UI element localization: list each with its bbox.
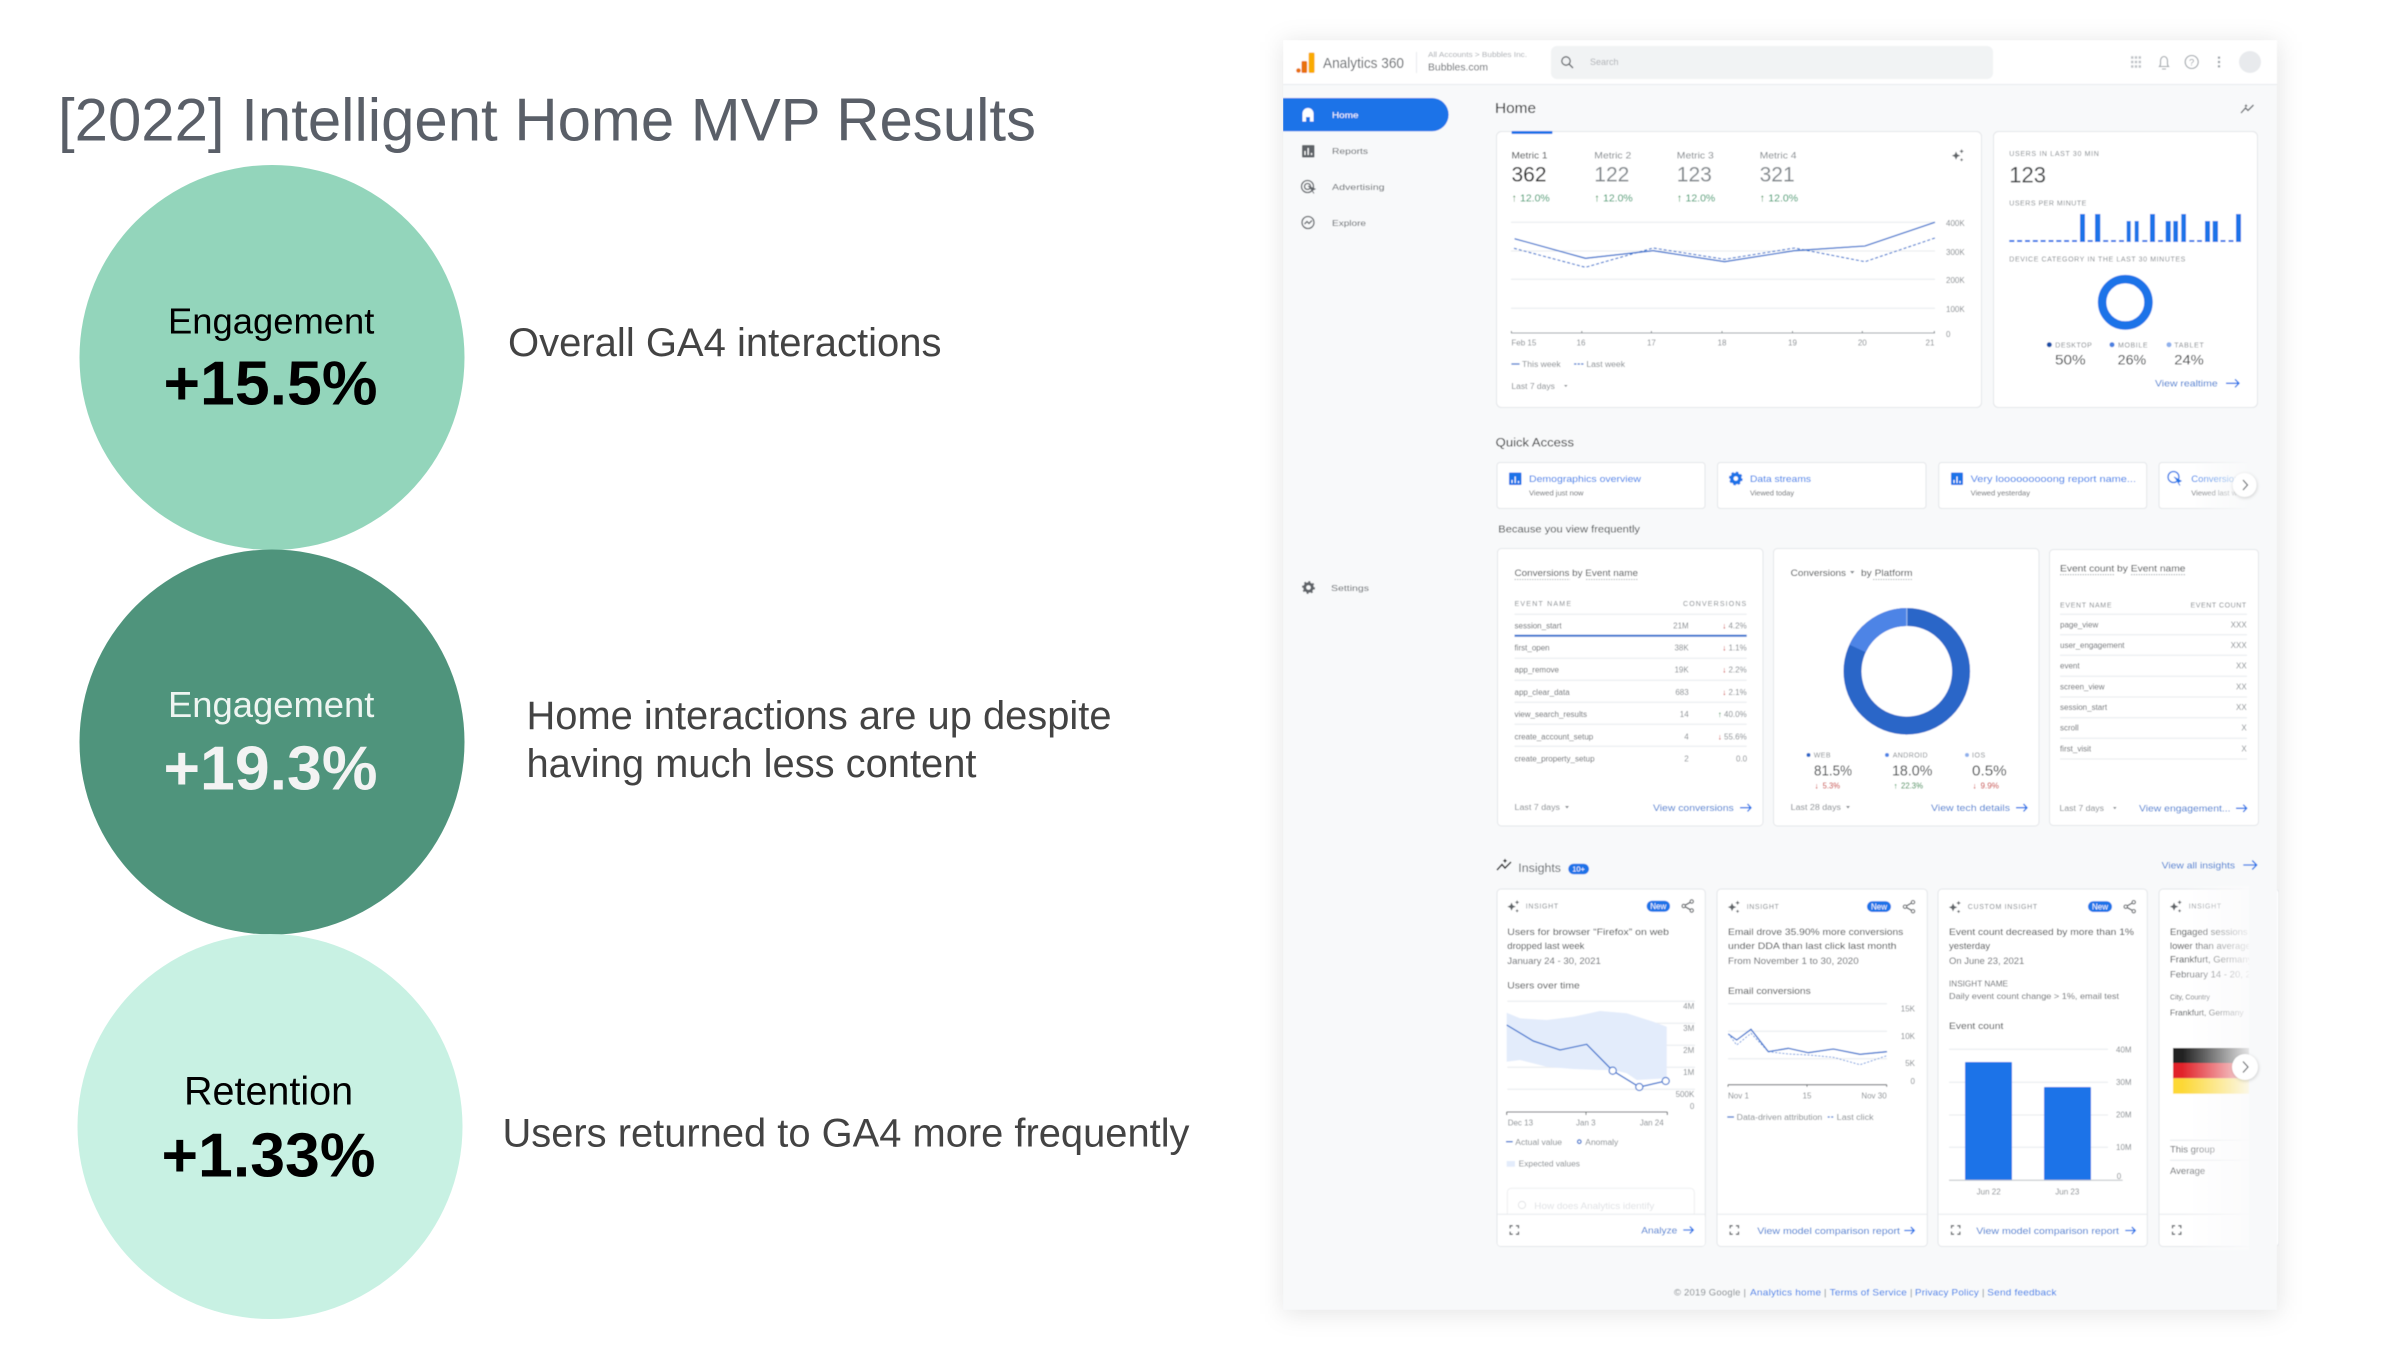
line chart: 300K xyxy=(1946,248,1965,257)
metric tabs: ↑ xyxy=(1594,193,1600,205)
card footer xyxy=(2060,804,2247,815)
card footer: Last 7 days xyxy=(1514,803,1560,812)
table rows: XX xyxy=(2236,703,2247,712)
account breadcrumb xyxy=(1428,50,1527,74)
line chart: 19 xyxy=(1788,339,1797,348)
page heading: home: Home xyxy=(1495,100,1536,117)
insight text: February 14 - 20, 2021 xyxy=(2170,970,2267,981)
line chart: 20 xyxy=(1858,339,1867,348)
button: next chevron xyxy=(2232,1054,2258,1081)
button: next chevron xyxy=(2233,473,2257,498)
card footer xyxy=(1514,803,1751,814)
metric tabs: Metric 3 xyxy=(1677,150,1714,160)
icon: germany flag xyxy=(2173,1048,2249,1094)
insight text: Daily event count change > 1%, email test xyxy=(1949,991,2120,1001)
bar chart: event count: 0 xyxy=(2117,1172,2122,1181)
card: conversions by event name: CONVERSIONS xyxy=(1683,601,1747,608)
insight text: under DDA than last click last month xyxy=(1728,941,1896,952)
chart: users over time xyxy=(1507,1001,1695,1128)
insight text: City, Country xyxy=(2170,994,2210,1001)
table rows: event xyxy=(2060,662,2080,671)
link: view realtime: View realtime xyxy=(2155,379,2218,390)
dashboard footer links: Analytics home xyxy=(1750,1288,1821,1299)
insight text xyxy=(1728,927,1904,997)
table rows: ↓ 55.6% xyxy=(1718,732,1747,741)
dashboard footer links: | xyxy=(1824,1288,1827,1299)
heading: insights: 10+ xyxy=(1572,864,1586,874)
bar chart: event count: Jun 23 xyxy=(2055,1187,2080,1196)
description: overall GA4 interactions: Overall GA4 interactions xyxy=(508,321,942,365)
table rows: 21M xyxy=(1673,622,1689,631)
metric circle: retention 1.33%: Retention xyxy=(184,1070,353,1114)
card footer: View model comparison report xyxy=(1976,1226,2119,1237)
chart: email conversions: 5K xyxy=(1905,1059,1916,1068)
tile: conversions partial xyxy=(2159,460,2272,512)
icon: insights trend xyxy=(2241,104,2254,113)
insight text: Users over time xyxy=(1507,981,1580,992)
chart: email conversions: Nov 30 xyxy=(1861,1091,1887,1100)
insight text: Event count decreased by more than 1% xyxy=(1949,927,2135,938)
metric circle: engagement 15.5%: +15.5% xyxy=(164,350,378,418)
platform legend: WEB xyxy=(1814,752,1831,759)
chart legend xyxy=(1727,1113,1875,1122)
table rows: view_search_results xyxy=(1514,710,1587,719)
table rows: X xyxy=(2241,724,2247,733)
link: view all insights: View all insights xyxy=(2162,860,2235,871)
line chart: 100K xyxy=(1946,305,1965,314)
tile: data streams: Data streams xyxy=(1750,474,1811,485)
platform legend: 9.9% xyxy=(1980,781,1999,790)
insight text: INSIGHT NAME xyxy=(1949,980,2008,989)
table rows xyxy=(1514,614,1748,763)
table rows: X xyxy=(2241,744,2247,753)
chart legend xyxy=(1511,360,1626,369)
table rows: session_start xyxy=(2060,703,2108,712)
heading: insights: Insights xyxy=(1518,863,1561,875)
table rows: XXX xyxy=(2231,641,2247,650)
chart legend: Data-driven attribution xyxy=(1737,1113,1822,1122)
card: realtime users: 123 xyxy=(2009,162,2046,187)
nav item: advertising: Advertising xyxy=(1332,183,1384,192)
table rows: app_remove xyxy=(1514,666,1560,675)
insight text xyxy=(1507,927,1669,992)
chart: email conversions: 10K xyxy=(1901,1032,1916,1041)
card: conversions by platform: Conversions xyxy=(1791,568,1847,578)
chart: users over time: 3M xyxy=(1683,1024,1695,1033)
insight text xyxy=(2170,927,2267,1017)
insight text: Email drove 35.90% more conversions xyxy=(1728,927,1904,938)
device legend: 24% xyxy=(2174,351,2204,367)
insight card: email conversions: INSIGHT xyxy=(1747,904,1780,911)
insight card: frankfurt partial xyxy=(2159,886,2279,1250)
metric circle: engagement 15.5% xyxy=(80,165,464,550)
table rows: XX xyxy=(2236,682,2247,691)
chart: users over time: 500K xyxy=(1676,1090,1695,1099)
card: realtime users: USERS PER MINUTE xyxy=(2009,201,2087,208)
table rows: ↓ 4.2% xyxy=(1722,622,1747,631)
insight text: From November 1 to 30, 2020 xyxy=(1728,956,1859,967)
tile: long report name: Viewed yesterday xyxy=(1971,489,2030,498)
insight text: Users for browser “Firefox” on web xyxy=(1507,927,1669,938)
insight card: email conversions: New xyxy=(1871,902,1887,912)
nav item: reports xyxy=(1302,145,1368,158)
dashboard footer links: Terms of Service xyxy=(1830,1288,1907,1299)
platform legend: ANDROID xyxy=(1893,752,1928,759)
bar chart: event count: 30M xyxy=(2116,1078,2132,1087)
table rows: user_engagement xyxy=(2060,641,2125,650)
dashboard footer links: Send feedback xyxy=(1987,1288,2057,1299)
faded question prompt: How does Analytics identify xyxy=(1534,1201,1655,1212)
card: metrics line chart xyxy=(1496,131,1982,408)
chart legend: Last click xyxy=(1837,1113,1875,1122)
table rows: app_clear_data xyxy=(1514,688,1570,697)
bar chart: event count: 10M xyxy=(2116,1143,2132,1152)
insight card: event count custom insight xyxy=(1938,889,2147,1246)
card: conversions by event name: EVENT NAME xyxy=(1514,601,1572,608)
card: conversions by event name: Conversions by Event name xyxy=(1514,568,1638,578)
metric tabs: ↑ xyxy=(1760,193,1765,205)
heading: quick access: Quick Access xyxy=(1496,438,1574,450)
insight text: yesterday xyxy=(1949,941,1990,952)
bar chart: event count xyxy=(1949,1045,2132,1196)
chart: users over time: Jan 24 xyxy=(1640,1119,1664,1128)
card: conversions by platform xyxy=(1774,548,2039,826)
comparison rows xyxy=(2170,1140,2250,1177)
metric tabs: 122 xyxy=(1594,164,1629,187)
tile: conversions partial: Conversions xyxy=(2191,474,2244,485)
icon: sparkle xyxy=(1952,149,1964,162)
metric tabs: Metric 2 xyxy=(1594,150,1631,160)
chart: users over time: 2M xyxy=(1683,1046,1695,1055)
tile: demographics overview: Viewed just now xyxy=(1529,489,1584,498)
table rows: 38K xyxy=(1674,644,1689,653)
card: realtime users: DEVICE CATEGORY IN THE LAST 30 MINUTES xyxy=(2009,257,2186,264)
panel: analytics dashboard screenshot xyxy=(1283,40,2279,1310)
metric circle: engagement 15.5%: Engagement xyxy=(168,300,374,342)
faded question prompt xyxy=(1507,1188,1694,1218)
insight text: lower than average xyxy=(2170,941,2251,952)
platform legend: 81.5% xyxy=(1814,763,1852,780)
chart legend: Expected values xyxy=(1519,1160,1580,1169)
link: view realtime xyxy=(2155,379,2239,390)
dashboard footer links: Privacy Policy xyxy=(1915,1288,1979,1299)
insight card: event count custom insight: New xyxy=(2092,902,2108,912)
metric tabs: ↑ xyxy=(1512,193,1517,205)
metric tabs: ↑ xyxy=(1677,193,1682,205)
sidebar navigation xyxy=(1283,98,1449,593)
nav item: explore: Explore xyxy=(1332,219,1367,228)
bar chart: users per minute xyxy=(2009,214,2241,242)
card footer: Analyze xyxy=(1641,1225,1677,1236)
tile: data streams: Viewed today xyxy=(1750,489,1794,498)
platform legend: 5.3% xyxy=(1823,781,1840,790)
metric tabs: 123 xyxy=(1677,164,1712,187)
device legend: TABLET xyxy=(2174,342,2205,349)
search box: Search xyxy=(1590,57,1619,67)
insight text: Frankfurt, Germany xyxy=(2170,954,2253,966)
card footer xyxy=(1498,1214,1705,1246)
chart legend: This week xyxy=(1522,360,1562,369)
metric circle: engagement 19.3%: Engagement xyxy=(168,684,374,725)
table rows: ↑ 40.0% xyxy=(1718,710,1747,719)
device legend: MOBILE xyxy=(2118,342,2148,349)
comparison rows: This group xyxy=(2170,1145,2215,1156)
metric circle: retention 1.33% xyxy=(78,934,462,1319)
description: home interactions xyxy=(526,694,1112,786)
card footer xyxy=(1791,803,2027,814)
metric tabs: Metric 4 xyxy=(1760,150,1797,160)
nav item: settings: Settings xyxy=(1331,584,1369,593)
platform legend: ↓ xyxy=(1814,781,1818,790)
bar chart: event count: 20M xyxy=(2116,1111,2132,1120)
insight card: firefox users xyxy=(1497,889,1705,1246)
donut chart: platform xyxy=(1852,608,1961,726)
heading: because you view frequently: Because you view frequently xyxy=(1498,525,1640,536)
tile: long report name: Very looooooooong report name... xyxy=(1971,474,2136,485)
card: realtime users xyxy=(1994,132,2258,408)
card footer: View engagement... xyxy=(2139,804,2230,815)
platform legend: 0.5% xyxy=(1972,763,2007,780)
card footer xyxy=(1938,1214,2147,1237)
card: event count by event name: EVENT NAME xyxy=(2060,602,2112,609)
card footer xyxy=(1718,1214,1927,1237)
search box xyxy=(1551,46,1993,79)
table rows: 0.0 xyxy=(1736,754,1748,763)
card footer: Last 28 days xyxy=(1791,803,1841,812)
table rows: create_property_setup xyxy=(1514,754,1595,763)
platform legend: 22.3% xyxy=(1901,781,1923,790)
device legend xyxy=(2047,342,2205,367)
tile: demographics overview xyxy=(1497,462,1705,508)
header icons xyxy=(2131,51,2261,73)
description: home interactions: Home interactions are up despite xyxy=(526,694,1112,738)
chart: email conversions: 15K xyxy=(1901,1004,1916,1013)
card: conversions by event name xyxy=(1498,548,1763,826)
bar chart: event count: Jun 22 xyxy=(1977,1187,2001,1196)
header bar xyxy=(1283,40,2277,84)
description: users returned: Users returned to GA4 more frequently xyxy=(502,1111,1190,1155)
table rows: 683 xyxy=(1675,688,1689,697)
metric tabs: 12.0% xyxy=(1686,193,1715,205)
card footer: View tech details xyxy=(1931,803,2010,814)
card: event count by event name: EVENT COUNT xyxy=(2190,602,2247,609)
card: conversions by platform: by Platform xyxy=(1861,568,1912,578)
insight text: Engaged sessions xyxy=(2170,927,2248,938)
metric tabs: 362 xyxy=(1512,164,1547,187)
tile: conversions partial: Viewed last week xyxy=(2191,489,2249,498)
metric circle: engagement 19.3% xyxy=(80,550,464,934)
product name: Analytics 360 xyxy=(1323,55,1404,72)
metric tabs: Metric 1 xyxy=(1512,150,1548,160)
card: event count by event name: Event count by Event name xyxy=(2060,563,2186,573)
metric tabs: 12.0% xyxy=(1768,193,1798,205)
chart legend xyxy=(1506,1138,1618,1169)
tile: long report name xyxy=(1939,462,2147,508)
metric circle: retention 1.33%: +1.33% xyxy=(162,1122,376,1190)
insight card: firefox users: New xyxy=(1650,902,1667,911)
dashboard footer links: | xyxy=(1910,1288,1913,1299)
metric tabs: 321 xyxy=(1760,164,1795,187)
insight card: email conversions xyxy=(1717,889,1927,1246)
line chart: Feb 15 xyxy=(1511,339,1537,348)
chart: email conversions xyxy=(1728,1004,1916,1100)
insight text xyxy=(1949,927,2135,1032)
line chart: 16 xyxy=(1577,339,1586,348)
account breadcrumb: Bubbles.com xyxy=(1428,62,1488,74)
chart: users over time: 1M xyxy=(1683,1068,1695,1077)
quick access tiles xyxy=(1497,460,2272,512)
table rows: screen_view xyxy=(2060,682,2105,691)
nav item: reports: Reports xyxy=(1332,147,1368,156)
platform legend: ↑ xyxy=(1894,781,1898,790)
table rows: scroll xyxy=(2060,724,2079,733)
metric circle: engagement 19.3%: +19.3% xyxy=(164,734,378,804)
dashboard footer links: | xyxy=(1982,1288,1985,1299)
metric tabs: 12.0% xyxy=(1520,193,1550,205)
chart: email conversions: 15 xyxy=(1803,1091,1812,1100)
chart: email conversions: 0 xyxy=(1911,1077,1916,1086)
card footer: Last 7 days xyxy=(2060,804,2104,813)
table rows: first_open xyxy=(1514,644,1550,653)
panel shadow xyxy=(1283,42,2279,1314)
platform legend: IOS xyxy=(1972,752,1986,759)
insight text: January 24 - 30, 2021 xyxy=(1507,956,1601,967)
platform legend: 18.0% xyxy=(1892,763,1932,780)
insight text: dropped last week xyxy=(1507,941,1585,952)
comparison rows: Average xyxy=(2170,1166,2205,1177)
metric tabs: 12.0% xyxy=(1603,193,1633,205)
nav item: advertising xyxy=(1302,180,1384,194)
table rows: ↓ 1.1% xyxy=(1722,644,1747,653)
insight card: firefox users: INSIGHT xyxy=(1526,904,1559,911)
nav item: settings xyxy=(1303,582,1369,593)
platform legend: ↓ xyxy=(1972,781,1976,790)
insight card: frankfurt partial: INSIGHT xyxy=(2189,904,2222,911)
donut chart: device category xyxy=(2102,279,2148,325)
table rows: ↓ 2.1% xyxy=(1722,688,1747,697)
table rows: 14 xyxy=(1680,710,1689,719)
line chart: 17 xyxy=(1647,339,1656,348)
table rows xyxy=(2060,614,2247,759)
card footer: View model comparison report xyxy=(1757,1226,1900,1237)
title: [2022] Intelligent Home MVP Results xyxy=(58,86,1036,154)
chart: users over time: Jan 3 xyxy=(1576,1119,1596,1128)
table rows: session_start xyxy=(1514,622,1562,631)
header icons: ? xyxy=(2189,58,2194,68)
line chart: 18 xyxy=(1718,339,1727,348)
device legend: 50% xyxy=(2055,351,2086,367)
nav item: home active xyxy=(1283,98,1449,131)
insight text: Event count xyxy=(1949,1021,2004,1032)
tile: data streams xyxy=(1718,462,1926,508)
chart legend: Anomaly xyxy=(1585,1138,1618,1147)
device legend: 26% xyxy=(2118,351,2146,367)
table rows: 4 xyxy=(1684,732,1689,741)
table rows: XXX xyxy=(2231,620,2247,629)
chart: users over time: Dec 13 xyxy=(1508,1119,1534,1128)
chart legend: Actual value xyxy=(1515,1138,1563,1147)
metric tabs xyxy=(1512,150,1798,205)
line chart: 200K xyxy=(1946,276,1965,285)
insight text: Frankfurt, Germany xyxy=(2170,1007,2244,1017)
insight card: event count custom insight: CUSTOM INSIGHT xyxy=(1968,904,2038,911)
account breadcrumb: All Accounts > Bubbles Inc. xyxy=(1428,50,1527,59)
chart: users over time: 0 xyxy=(1690,1102,1695,1111)
nav item: explore xyxy=(1302,216,1367,228)
card: realtime users: USERS IN LAST 30 MIN xyxy=(2009,151,2099,158)
dashboard footer links: © 2019 Google | xyxy=(1674,1288,1746,1299)
card footer: View conversions xyxy=(1653,803,1734,814)
chart: users over time: 4M xyxy=(1683,1002,1695,1011)
icon: analytics logo xyxy=(1296,52,1315,73)
dashboard footer links xyxy=(1674,1288,2057,1299)
insight text: Email conversions xyxy=(1728,986,1811,997)
device legend: DESKTOP xyxy=(2055,342,2092,349)
platform legend xyxy=(1806,752,2007,790)
table rows: XX xyxy=(2236,662,2247,671)
table rows: 2 xyxy=(1684,754,1689,763)
line chart xyxy=(1511,219,1965,348)
tile: demographics overview: Demographics overview xyxy=(1529,474,1641,485)
table rows: create_account_setup xyxy=(1514,732,1594,741)
bar chart: event count: 40M xyxy=(2116,1045,2132,1054)
chart: email conversions: Nov 1 xyxy=(1728,1091,1749,1100)
description: home interactions: having much less content xyxy=(526,742,976,786)
line chart: 21 xyxy=(1926,339,1935,348)
line chart: 0 xyxy=(1946,330,1951,339)
insight text: On June 23, 2021 xyxy=(1949,956,2024,967)
table rows: page_view xyxy=(2060,620,2098,629)
line chart: 400K xyxy=(1946,219,1965,228)
table rows: ↓ 2.2% xyxy=(1722,666,1747,675)
table rows: 19K xyxy=(1674,666,1689,675)
card: event count by event name xyxy=(2050,550,2258,826)
heading: insights xyxy=(1497,858,1589,875)
nav item: home active: Home xyxy=(1332,111,1359,120)
table rows: first_visit xyxy=(2060,744,2092,753)
date range: Last 7 days xyxy=(1511,382,1555,391)
chart legend: Last week xyxy=(1586,360,1626,369)
